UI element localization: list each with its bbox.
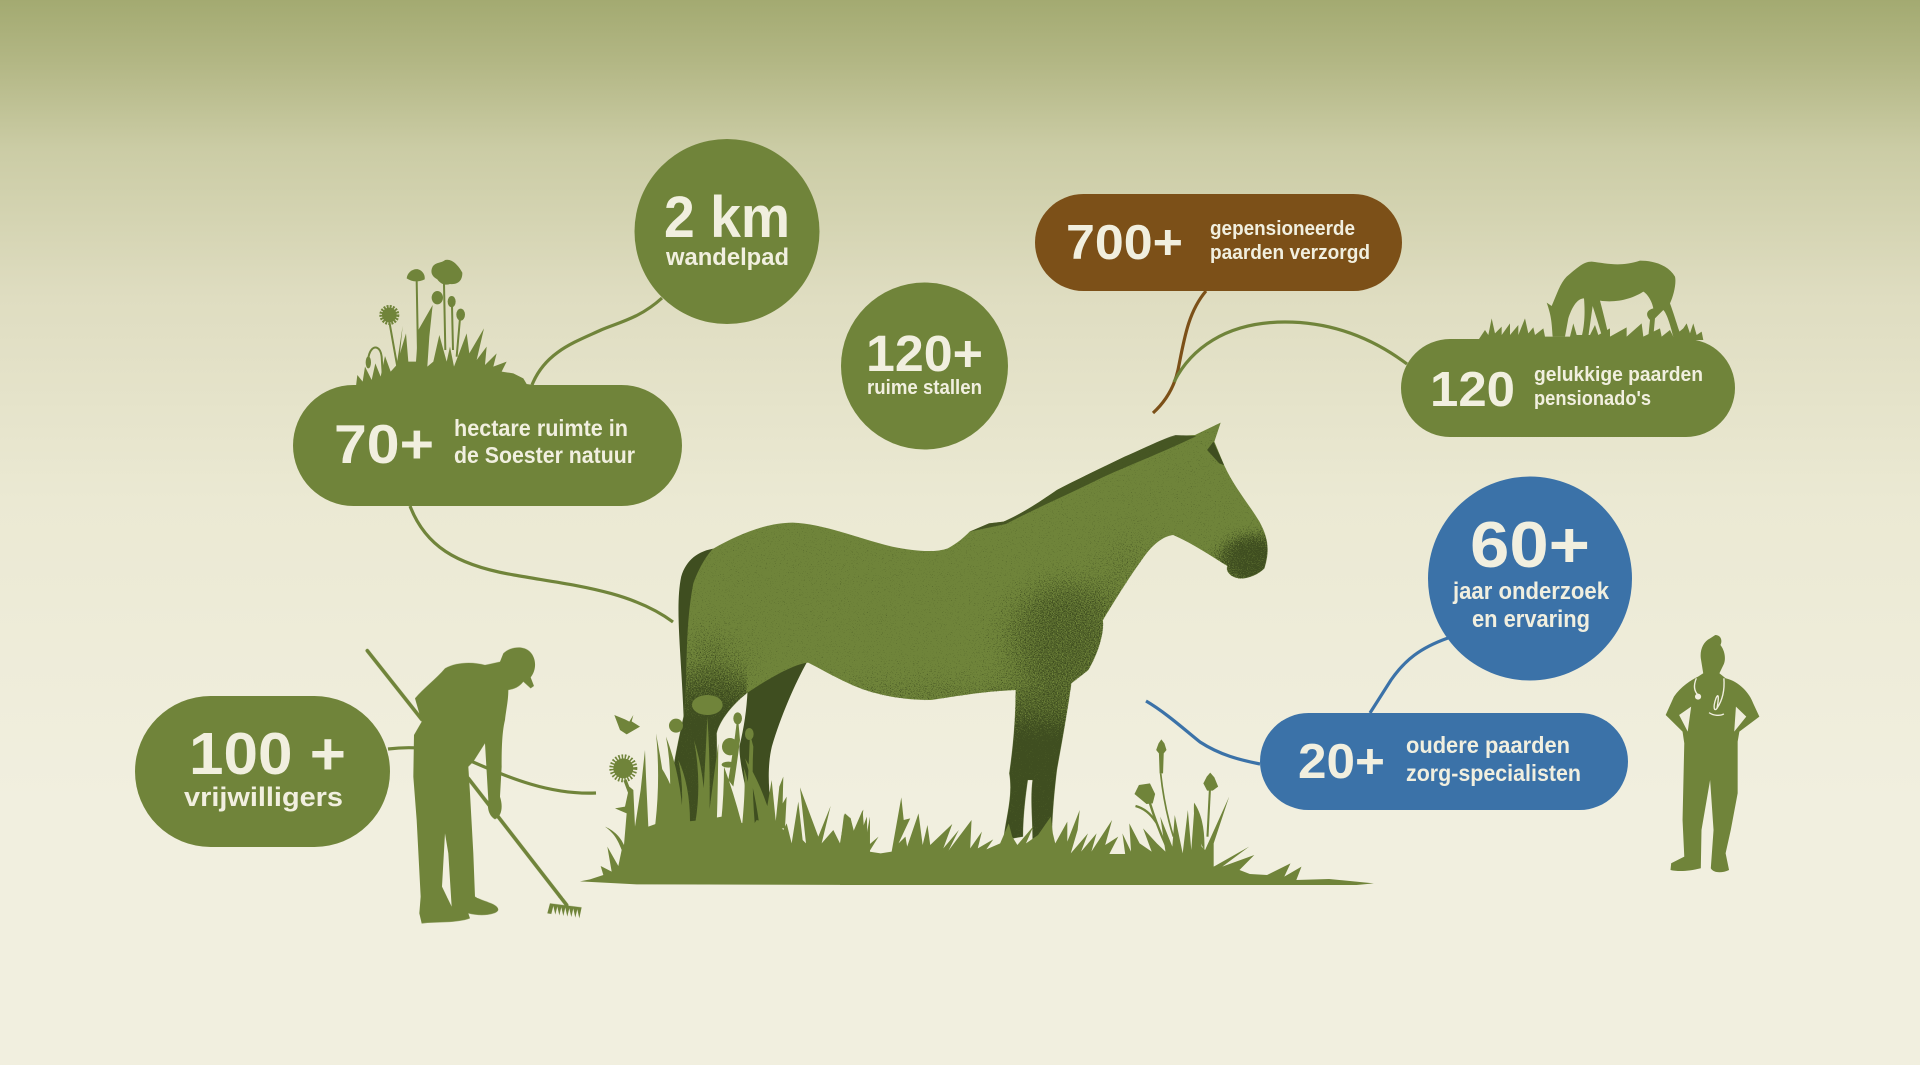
grazing horse <box>1547 261 1682 337</box>
flower: spike bud <box>733 712 742 724</box>
person silhouette <box>413 647 535 923</box>
flower: small spike <box>1203 773 1218 791</box>
flower stem: cornflower <box>1135 803 1167 848</box>
number: 120 <box>1430 363 1515 417</box>
flower: middle head <box>722 738 738 755</box>
connector: 100+ to grass <box>388 748 596 793</box>
connector: 70+ to horse <box>410 506 673 622</box>
label line 1: gelukkige paarden <box>1534 364 1703 386</box>
number: 2 km <box>664 185 790 250</box>
grass blades over legs <box>655 713 787 837</box>
leaf <box>1194 803 1204 850</box>
number: 700+ <box>1066 216 1183 270</box>
flower: small head <box>669 719 683 733</box>
illustration: flowers and grass on pill <box>356 260 540 386</box>
number: 70+ <box>334 413 434 475</box>
number: 100 + <box>189 721 346 787</box>
illustration: grass right part <box>840 739 1374 885</box>
circle: 2 km wandelpad <box>634 139 820 324</box>
tail <box>678 548 715 717</box>
flower: leaf <box>722 762 735 768</box>
connector: 2 km to 70+ <box>532 298 662 385</box>
connector: 60+ to 20+ <box>1370 638 1448 713</box>
rake handle <box>367 651 567 905</box>
rake head <box>547 903 582 918</box>
stems <box>368 280 460 373</box>
forelock <box>1207 442 1224 465</box>
flower stem: small <box>1207 790 1210 837</box>
label line 2: pensionado's <box>1534 388 1651 410</box>
pill shape <box>1260 713 1628 810</box>
bud 3 <box>456 309 465 321</box>
flower: large seed head <box>692 695 723 715</box>
pill shape <box>1035 194 1402 291</box>
label line 1: hectare ruimte in <box>454 415 628 441</box>
flower: dandelion left <box>613 758 633 778</box>
flower: cornflower <box>1134 783 1155 804</box>
flower stem: tall <box>1161 773 1173 837</box>
label line 1: jaar onderzoek <box>1452 578 1610 605</box>
label line 1: oudere paarden <box>1406 732 1570 758</box>
pill shape <box>1401 339 1735 437</box>
connector: 20+ to horse <box>1146 701 1260 764</box>
number: 60+ <box>1470 508 1590 581</box>
bud 1 <box>432 291 443 304</box>
circle: 120+ ruime stallen <box>841 282 1008 450</box>
seed head <box>407 269 425 281</box>
flower: spike bud right <box>745 728 754 740</box>
grass mass left <box>580 750 870 885</box>
vet silhouette <box>1666 635 1759 872</box>
icon: volunteer with rake <box>367 647 582 923</box>
horse body <box>667 423 1267 840</box>
pill shape <box>293 385 682 506</box>
grass mound <box>356 305 540 386</box>
poppy <box>431 260 462 285</box>
circle: 60+ jaar onderzoek <box>1428 476 1632 680</box>
pill: 100+ vrijwilligers <box>135 696 390 847</box>
icon: veterinarian with stethoscope <box>1666 635 1759 872</box>
bud 2 <box>448 296 456 307</box>
label line 2: de Soester natuur <box>454 442 635 468</box>
pill: 120 gelukkige paarden <box>1401 261 1735 437</box>
far hind leg <box>739 662 807 837</box>
pill shape <box>135 696 390 847</box>
connector: 700+ to horse <box>1153 291 1206 413</box>
label line 2: paarden verzorgd <box>1210 242 1370 264</box>
flower: tall spike <box>1156 739 1166 773</box>
grass mass right <box>840 797 1374 885</box>
illustration: grazing horse on pill <box>1478 261 1703 340</box>
label: wandelpad <box>665 244 789 271</box>
flower stem <box>625 780 630 793</box>
stethoscope <box>1694 678 1724 715</box>
label line 2: zorg-specialisten <box>1406 760 1581 786</box>
circle shape <box>634 139 820 324</box>
pill: 20+ oudere paarden <box>1260 713 1628 810</box>
horse stippled shading <box>655 533 1294 847</box>
illustration: large horse <box>655 423 1294 847</box>
circle shape <box>841 282 1008 450</box>
label line 1: gepensioneerde <box>1210 218 1355 240</box>
icon: butterfly <box>614 715 640 734</box>
number: 120+ <box>866 325 983 382</box>
connector: 120 to horse <box>1174 322 1407 382</box>
label: ruime stallen <box>867 377 982 399</box>
illustration: grass left part <box>580 695 870 885</box>
dandelion <box>382 308 397 322</box>
pill: 70+ hectare <box>293 260 682 506</box>
circle shape <box>1428 476 1632 680</box>
hanging bud <box>366 356 371 368</box>
label: vrijwilligers <box>184 782 343 812</box>
mane <box>970 435 1196 532</box>
label line 2: en ervaring <box>1472 606 1590 633</box>
pill: 700+ gepensioneerde paarden <box>1035 194 1402 291</box>
grass strip <box>1478 318 1703 340</box>
number: 20+ <box>1298 735 1385 789</box>
